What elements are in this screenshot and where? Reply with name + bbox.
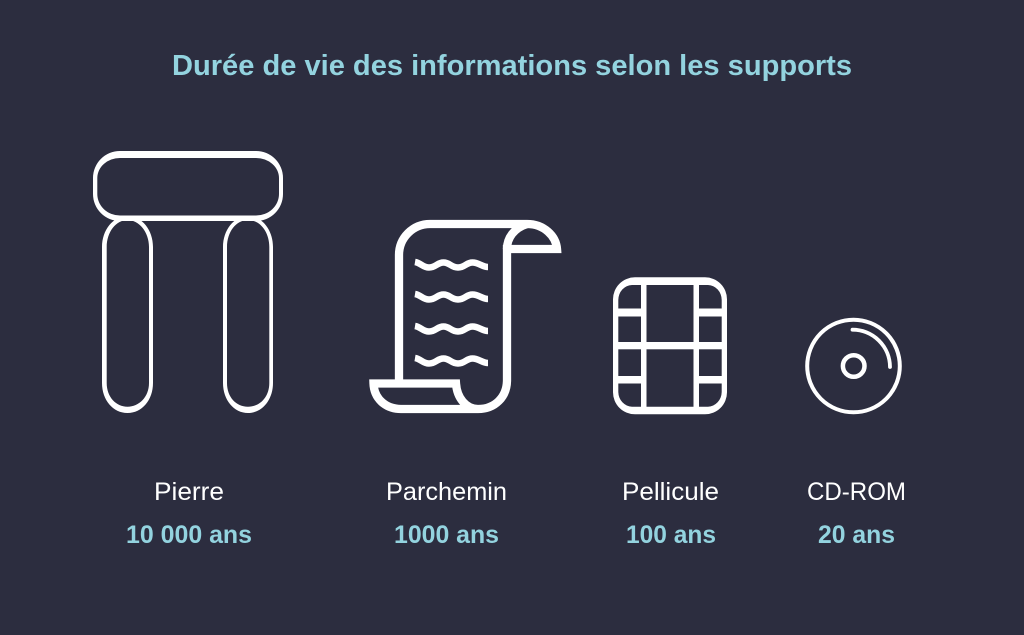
- label: Pellicule: Pellicule: [622, 478, 719, 506]
- value: 20 ans: 20 ans: [818, 521, 895, 549]
- label: CD-ROM: CD-ROM: [807, 478, 906, 506]
- value: 1000 ans: 1000 ans: [394, 521, 499, 549]
- icon: compact disc: [807, 320, 900, 412]
- title: Durée de vie des informations selon les supports: [172, 50, 852, 82]
- icon: film strip: [613, 277, 727, 414]
- panel: CD-ROM: [807, 320, 906, 549]
- panel: Pierre: [93, 151, 283, 549]
- panel: Pellicule: [613, 277, 727, 549]
- icon: stone dolmen: [93, 151, 283, 413]
- value: 10 000 ans: 10 000 ans: [126, 521, 252, 549]
- icon: parchment scroll: [374, 224, 557, 409]
- value: 100 ans: 100 ans: [626, 521, 716, 549]
- label: Pierre: Pierre: [154, 478, 224, 506]
- label: Parchemin: Parchemin: [386, 478, 507, 506]
- panel: Parchemin: [374, 224, 557, 549]
